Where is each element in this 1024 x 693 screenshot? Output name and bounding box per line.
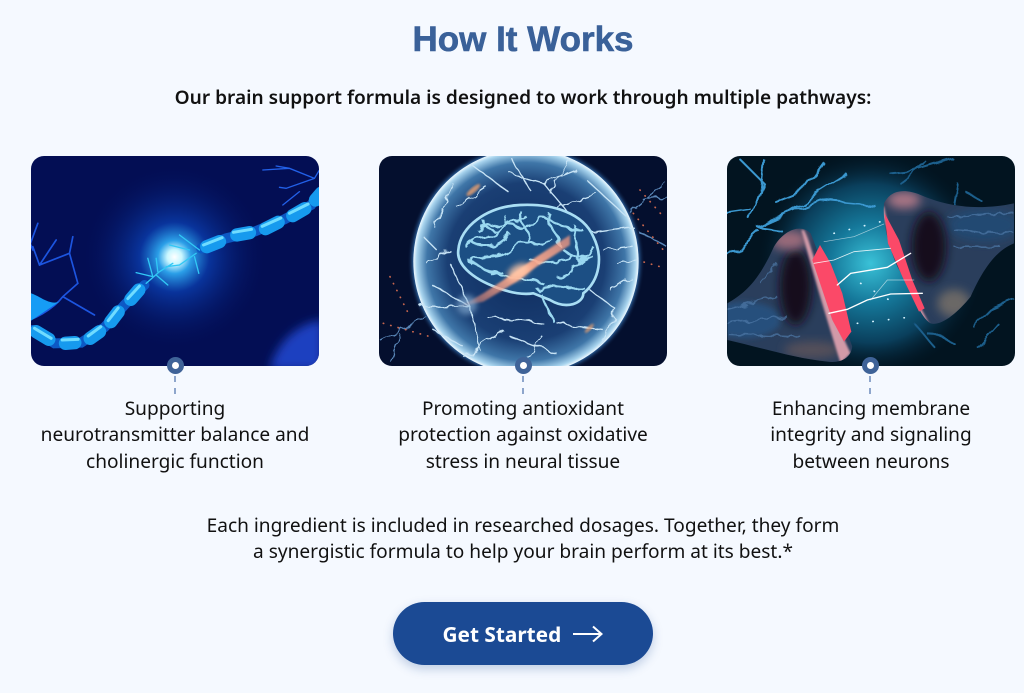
connector line 1 bbox=[174, 376, 176, 394]
button label: Get Started bbox=[442, 621, 561, 649]
blob: cell at lower right bbox=[269, 320, 323, 370]
panel: brain image bbox=[379, 156, 667, 366]
caption 3: Enhancing membrane bbox=[772, 394, 970, 420]
connector line 2 bbox=[522, 376, 524, 394]
connector line 3 bbox=[869, 376, 871, 394]
closing text bbox=[207, 512, 839, 564]
caption 2: Promoting antioxidant bbox=[422, 394, 624, 420]
panel: synapse image bbox=[727, 156, 1015, 366]
icon: arrow bbox=[573, 626, 603, 642]
caption 1: Supporting bbox=[125, 394, 225, 420]
caption 3: between neurons bbox=[792, 448, 950, 474]
caption 2 bbox=[398, 394, 648, 474]
title: How It Works bbox=[412, 20, 634, 59]
closing text: Each ingredient is included in researched dosages. Together, they form bbox=[207, 512, 839, 538]
icon: connector dot 1 bbox=[167, 357, 184, 374]
caption 2: stress in neural tissue bbox=[426, 448, 620, 474]
caption 1 bbox=[41, 394, 309, 474]
caption 3 bbox=[770, 394, 972, 474]
subtitle: Our brain support formula is designed to work through multiple pathways: bbox=[175, 84, 871, 110]
button: Get Started bbox=[393, 602, 653, 665]
closing text: a synergistic formula to help your brain perform at its best.* bbox=[253, 538, 793, 564]
caption 1: neurotransmitter balance and bbox=[41, 421, 309, 447]
icon: connector dot 2 bbox=[515, 357, 532, 374]
panel: neuron image bbox=[31, 156, 319, 366]
caption 1: cholinergic function bbox=[86, 448, 264, 474]
icon: connector dot 3 bbox=[862, 357, 879, 374]
caption 3: integrity and signaling bbox=[770, 421, 972, 447]
caption 2: protection against oxidative bbox=[398, 421, 648, 447]
